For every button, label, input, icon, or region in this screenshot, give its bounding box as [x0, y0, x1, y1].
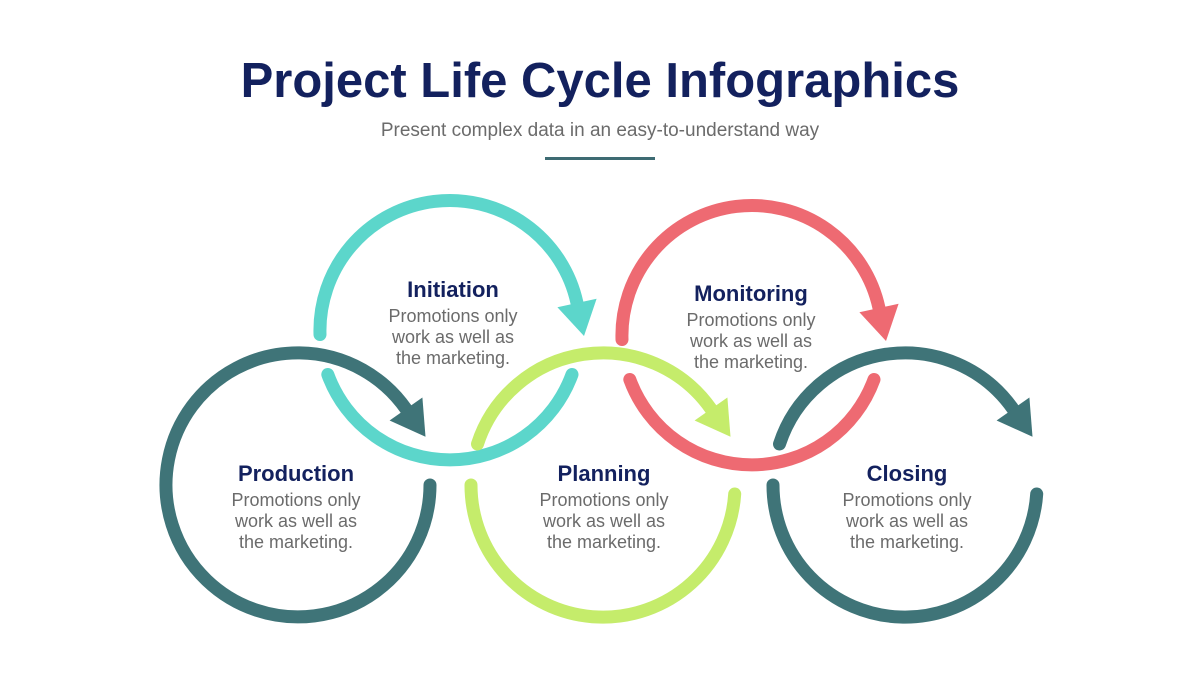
arc: closing	[773, 353, 1037, 617]
text: planning: work as well as	[543, 511, 665, 531]
text: closing: Closing	[867, 461, 947, 486]
text: closing	[842, 461, 972, 552]
text: closing: the marketing.	[850, 532, 964, 552]
text: closing: work as well as	[846, 511, 968, 531]
arc: initiation	[320, 200, 597, 460]
divider	[545, 157, 655, 160]
text: closing: Promotions only	[842, 490, 972, 510]
text: monitoring: Monitoring	[694, 281, 808, 306]
title: Project Life Cycle Infographics	[241, 54, 959, 108]
text: initiation	[388, 277, 518, 368]
text: initiation: Promotions only	[388, 306, 518, 326]
text: planning: Planning	[558, 461, 650, 486]
arc: monitoring	[622, 205, 899, 465]
text: production	[231, 461, 361, 552]
text: initiation: work as well as	[392, 327, 514, 347]
text: monitoring: the marketing.	[694, 352, 808, 372]
text: initiation: the marketing.	[396, 348, 510, 368]
text: planning: Promotions only	[539, 490, 669, 510]
arc: planning	[471, 353, 735, 617]
text: initiation: Initiation	[407, 277, 499, 302]
text: production: work as well as	[235, 511, 357, 531]
text: monitoring	[686, 281, 816, 372]
text: production: Promotions only	[231, 490, 361, 510]
text: monitoring: work as well as	[690, 331, 812, 351]
text: production: Production	[238, 461, 354, 486]
arc: production	[166, 353, 430, 617]
text: planning: the marketing.	[547, 532, 661, 552]
subtitle: Present complex data in an easy-to-understand way	[381, 120, 819, 141]
text: monitoring: Promotions only	[686, 310, 816, 330]
text: planning	[539, 461, 669, 552]
text: production: the marketing.	[239, 532, 353, 552]
